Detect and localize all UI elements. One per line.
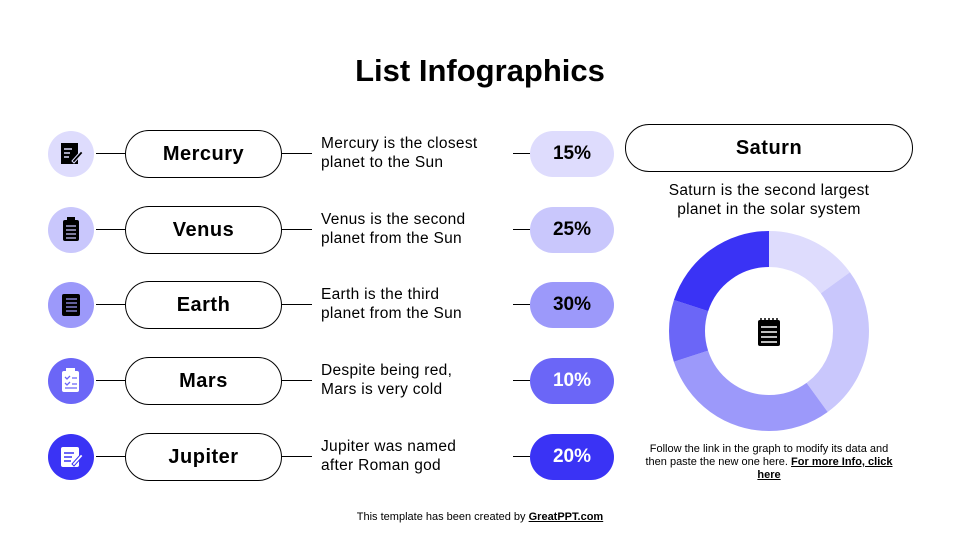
percent (530, 207, 614, 253)
icon: checklist (48, 358, 94, 404)
percent: 10% (553, 370, 591, 391)
name pill: Mercury (163, 143, 244, 165)
Saturn description: Saturn is the second largest planet in the solar system (669, 182, 869, 218)
percent (530, 434, 614, 480)
name pill (125, 130, 282, 178)
title: List Infographics (355, 53, 605, 88)
description: Jupiter was named after Roman god (321, 438, 456, 474)
footnote: Follow the link in the graph to modify its data and then paste the new one here. For more Info, click here (645, 443, 893, 481)
Saturn heading pill: Saturn (736, 137, 802, 159)
description: Mercury is the closest planet to the Sun (321, 135, 477, 171)
percent: 20% (553, 446, 591, 467)
percent (530, 282, 614, 328)
row: Earth (48, 281, 614, 329)
name pill (125, 357, 282, 405)
row: Venus (48, 206, 614, 254)
icon: notepad pen (48, 131, 94, 177)
name pill: Earth (177, 294, 230, 316)
name pill (125, 206, 282, 254)
name pill: Mars (179, 370, 228, 392)
row: Mercury (48, 130, 614, 178)
percent (530, 358, 614, 404)
row: Jupiter (48, 433, 614, 481)
icon: clipboard (48, 207, 94, 253)
name pill (125, 281, 282, 329)
Saturn heading pill (625, 124, 913, 172)
icon: document pen (48, 434, 94, 480)
percent: 30% (553, 294, 591, 315)
footer credit: This template has been created by GreatPPT.com (357, 511, 603, 523)
name pill: Venus (173, 219, 234, 241)
panel: Saturn (625, 124, 913, 481)
percent (530, 131, 614, 177)
row: Mars (48, 357, 614, 405)
icon: notebook (48, 282, 94, 328)
description: Earth is the third planet from the Sun (321, 286, 462, 322)
percent: 15% (553, 143, 591, 164)
description: Venus is the second planet from the Sun (321, 211, 465, 247)
name pill (125, 433, 282, 481)
donut chart (669, 231, 869, 431)
name pill: Jupiter (168, 446, 239, 468)
description: Despite being red, Mars is very cold (321, 362, 452, 398)
percent: 25% (553, 219, 591, 240)
